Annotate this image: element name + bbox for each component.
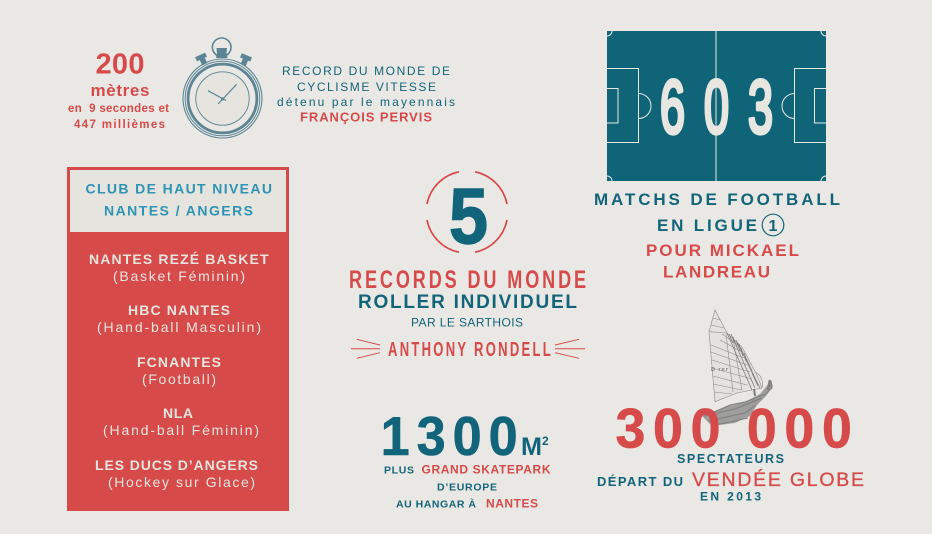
panel: 300 000 spectateurs xyxy=(597,310,864,504)
club: NLA xyxy=(103,405,259,438)
panel: clubs de haut niveau xyxy=(67,167,289,511)
text: skatepark description: PLUS xyxy=(384,464,414,476)
text: skatepark description: D’EUROPE xyxy=(437,482,497,494)
club: NLA: (Hand-ball Féminin) xyxy=(103,422,259,438)
panel header xyxy=(70,170,286,232)
stat: 1300 m2: M xyxy=(521,433,542,461)
name with rays: Anthony Rondell xyxy=(351,339,585,361)
stat: 603: 6 xyxy=(660,65,685,149)
text: skatepark description: NANTES xyxy=(486,496,538,510)
club: Nantes Rezé Basket xyxy=(89,251,269,284)
text: par le sarthois: PAR LE SARTHOIS xyxy=(411,316,523,330)
text: matchs de football en ligue 1: MATCHS DE FOOTBALL xyxy=(594,190,840,209)
subheading: roller individuel: ROLLER INDIVIDUEL xyxy=(358,292,577,313)
panel header: CLUB DE HAUT NIVEAU xyxy=(86,180,272,196)
text: pour Mickael Landreau: LANDREAU xyxy=(663,262,770,282)
club: HBC Nantes: (Hand-ball Masculin) xyxy=(97,319,261,335)
club: Les Ducs d'Angers: LES DUCS D’ANGERS xyxy=(95,457,258,473)
stat: 200 metres xyxy=(68,48,169,131)
football pitch xyxy=(607,31,826,181)
stat: 603: 0 xyxy=(704,65,729,149)
text: skatepark description xyxy=(384,462,551,510)
text: spectateurs, départ du Vendée Globe en 2013: EN 2013 xyxy=(700,490,761,504)
text: cycling record description: RECORD DU MONDE DE xyxy=(282,64,450,78)
text: spectateurs, départ du Vendée Globe en 2013: VENDÉE GLOBE xyxy=(692,468,864,491)
stat: 300 000: 300 000 xyxy=(616,396,860,460)
club: FC Nantes: FCNANTES xyxy=(137,354,221,370)
stat: 1300 m2: 1300 xyxy=(381,405,525,467)
panel: 5 records du monde xyxy=(349,171,589,361)
club: NLA: NLA xyxy=(163,405,193,421)
illustration: sailing boat xyxy=(702,310,773,426)
text: spectateurs, départ du Vendée Globe en 2013: DÉPART DU xyxy=(597,474,683,489)
stat: 1300 m2: 2 xyxy=(542,434,549,448)
stat: 603 xyxy=(660,65,773,149)
club: FC Nantes: (Football) xyxy=(142,371,216,387)
panel: 603 matchs xyxy=(594,31,840,282)
icon: circled number 5 xyxy=(427,171,507,260)
text: cycling record description: FRANÇOIS PERVIS xyxy=(300,110,432,124)
club: Les Ducs d'Angers: (Hockey sur Glace) xyxy=(108,474,255,490)
text: cycling record description xyxy=(277,64,455,124)
text: spectateurs, départ du Vendée Globe en 2013 xyxy=(597,452,864,504)
stat: 603: 3 xyxy=(748,65,773,149)
text: matchs de football en ligue 1: EN LIGUE xyxy=(657,216,757,235)
club: HBC Nantes: HBC NANTES xyxy=(128,302,230,318)
text: pour Mickael Landreau: POUR MICKAEL xyxy=(646,241,799,260)
text: spectateurs, départ du Vendée Globe en 2013: SPECTATEURS xyxy=(677,452,784,466)
text: cycling record description: CYCLISME VITESSE xyxy=(297,80,436,94)
heading: records du monde: RECORDS DU MONDE xyxy=(349,266,589,294)
club: FC Nantes xyxy=(137,354,221,387)
stat: 200 metres: 200 xyxy=(96,48,144,80)
stat: 200 metres: mètres xyxy=(90,81,150,100)
panel: 200 metres cycling record xyxy=(68,38,455,138)
icon: stopwatch xyxy=(183,38,262,138)
club: Les Ducs d'Angers xyxy=(95,457,258,490)
panel header: NANTES / ANGERS xyxy=(104,202,253,218)
text: skatepark description: AU HANGAR À xyxy=(396,498,476,510)
text: pour Mickael Landreau xyxy=(646,241,799,282)
stat: 200 metres: 447 millièmes xyxy=(74,119,165,131)
text: skatepark description: GRAND SKATEPARK xyxy=(422,462,551,476)
illustration: sailing boat: D rer xyxy=(711,367,729,373)
panel: 1300 m2 skatepark xyxy=(381,405,551,510)
club: Nantes Rezé Basket: NANTES REZÉ BASKET xyxy=(89,251,269,267)
text: matchs de football en ligue 1: 1 xyxy=(768,218,778,235)
icon: circled number 5: 5 xyxy=(449,171,488,260)
text: cycling record description: détenu par le mayennais xyxy=(277,95,455,109)
red panel background xyxy=(67,167,289,511)
club: HBC Nantes xyxy=(97,302,261,335)
text: matchs de football en ligue 1 xyxy=(594,190,840,236)
club: Nantes Rezé Basket: (Basket Féminin) xyxy=(113,268,245,284)
name with rays: Anthony Rondell: ANTHONY RONDELL xyxy=(388,339,553,361)
stat: 200 metres: en 9 secondes et xyxy=(68,103,169,115)
